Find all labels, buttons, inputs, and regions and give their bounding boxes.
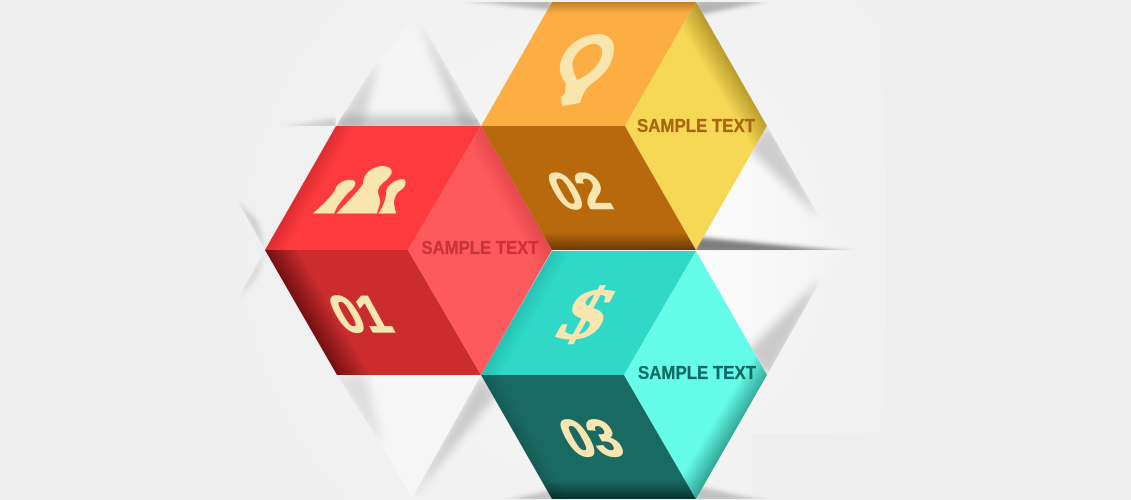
face: red top with people icon (265, 126, 481, 250)
face: light teal with sample text (624, 251, 767, 499)
face: yellow with sample text (625, 2, 767, 250)
face: orange top with bulb icon (481, 2, 696, 126)
face: brown with number 02 (481, 126, 696, 250)
number 01: 01 (319, 286, 402, 344)
hexagon 01: red (265, 126, 552, 375)
label: SAMPLE TEXT (638, 363, 756, 383)
hexagon 02: orange (481, 2, 767, 250)
hexagon 03: teal (481, 251, 767, 499)
face: dark red with number 01 (265, 250, 481, 375)
face: light red with sample text (408, 126, 552, 375)
icon: people (313, 166, 406, 214)
icon: dollar sign: $ (543, 275, 630, 354)
face: teal top with dollar icon (481, 251, 696, 375)
number 02: 02 (537, 163, 622, 221)
fold shadows on the background (237, 0, 860, 500)
label: SAMPLE TEXT (637, 116, 755, 136)
infographic: three hexagonal cubes (240, 2, 849, 499)
label: SAMPLE TEXT (422, 238, 538, 258)
face: dark teal with number 03 (481, 375, 696, 499)
number 03: 03 (549, 410, 634, 468)
icon: light bulb (560, 34, 614, 106)
